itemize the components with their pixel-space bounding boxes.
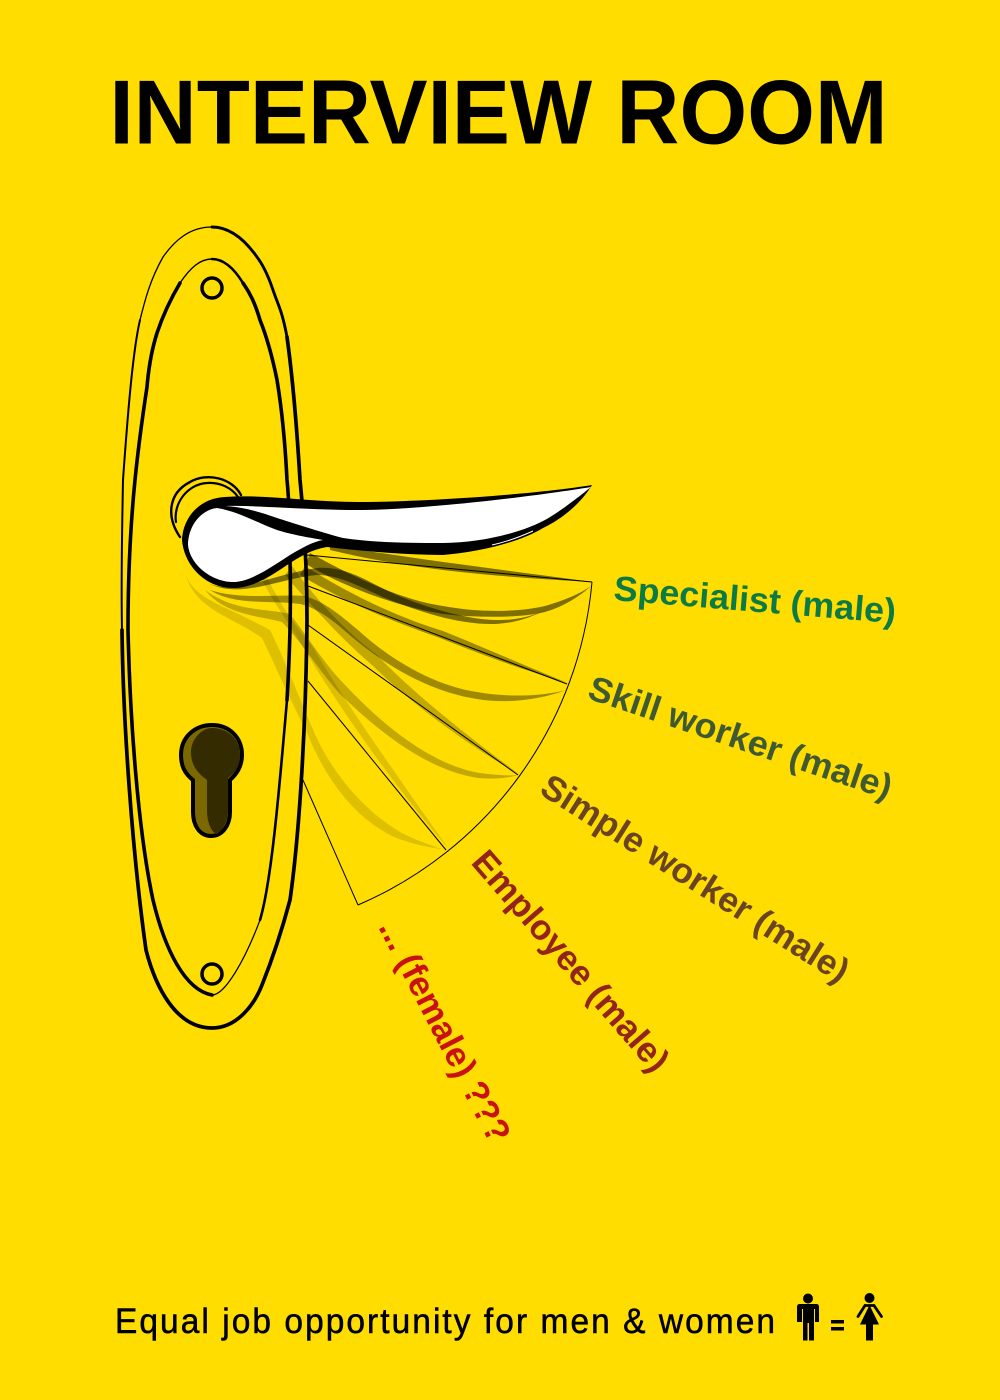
keyhole shadow <box>191 728 240 834</box>
plate outer top-right edge <box>212 227 287 337</box>
female ray <box>303 780 358 905</box>
icon: bottom screw <box>202 964 222 984</box>
handle knob highlight <box>188 508 323 582</box>
icon: man <box>797 1294 819 1340</box>
plate inner bottom-right thin edge <box>212 920 260 995</box>
employee ray <box>308 681 446 850</box>
icon: top screw <box>202 278 222 298</box>
arc of swing <box>358 582 592 905</box>
handle black silhouette <box>182 485 592 588</box>
skill worker ray <box>308 586 567 684</box>
keyhole body <box>181 725 242 836</box>
icon: rosette behind handle <box>171 477 241 537</box>
label: specialist: Specialist (male) <box>612 569 898 631</box>
ghost handle: female position <box>186 575 448 849</box>
handle underside sliver <box>492 531 533 545</box>
ghost handle: skill worker position <box>208 545 593 624</box>
icon: door handle <box>182 485 592 588</box>
plate inner top-left thin edge <box>180 259 212 283</box>
ghost handle: employee position <box>205 566 520 779</box>
simple worker ray <box>308 625 518 775</box>
plate outer heavy edge <box>122 337 307 1028</box>
plate inner top-right edge <box>212 259 243 283</box>
handle blade highlight <box>225 487 591 543</box>
label: female: ... (female) ??? <box>371 913 518 1149</box>
plate inner upper right heavy edge <box>243 283 290 700</box>
specialist ray <box>307 555 592 582</box>
title: INTERVIEW ROOM <box>110 61 888 163</box>
plate inner left heavy edge <box>128 283 212 995</box>
icon: door plate <box>122 227 307 1028</box>
fan of door-handle positions <box>303 555 592 905</box>
label: employee: Employee (male) <box>464 843 677 1080</box>
plate inner lower right edge <box>260 700 287 920</box>
ghost handle: simple worker position <box>210 566 568 701</box>
equals sign <box>831 1320 844 1330</box>
plate outer left edge <box>122 320 140 630</box>
label: simple worker: Simple worker (male) <box>534 767 856 991</box>
plate outer top-left thin edge <box>140 227 212 320</box>
icon: keyhole <box>181 725 242 836</box>
label: skill worker: Skill worker (male) <box>583 669 897 807</box>
icon: woman <box>858 1293 882 1340</box>
footer slogan: Equal job opportunity for men & women <box>115 1302 775 1341</box>
